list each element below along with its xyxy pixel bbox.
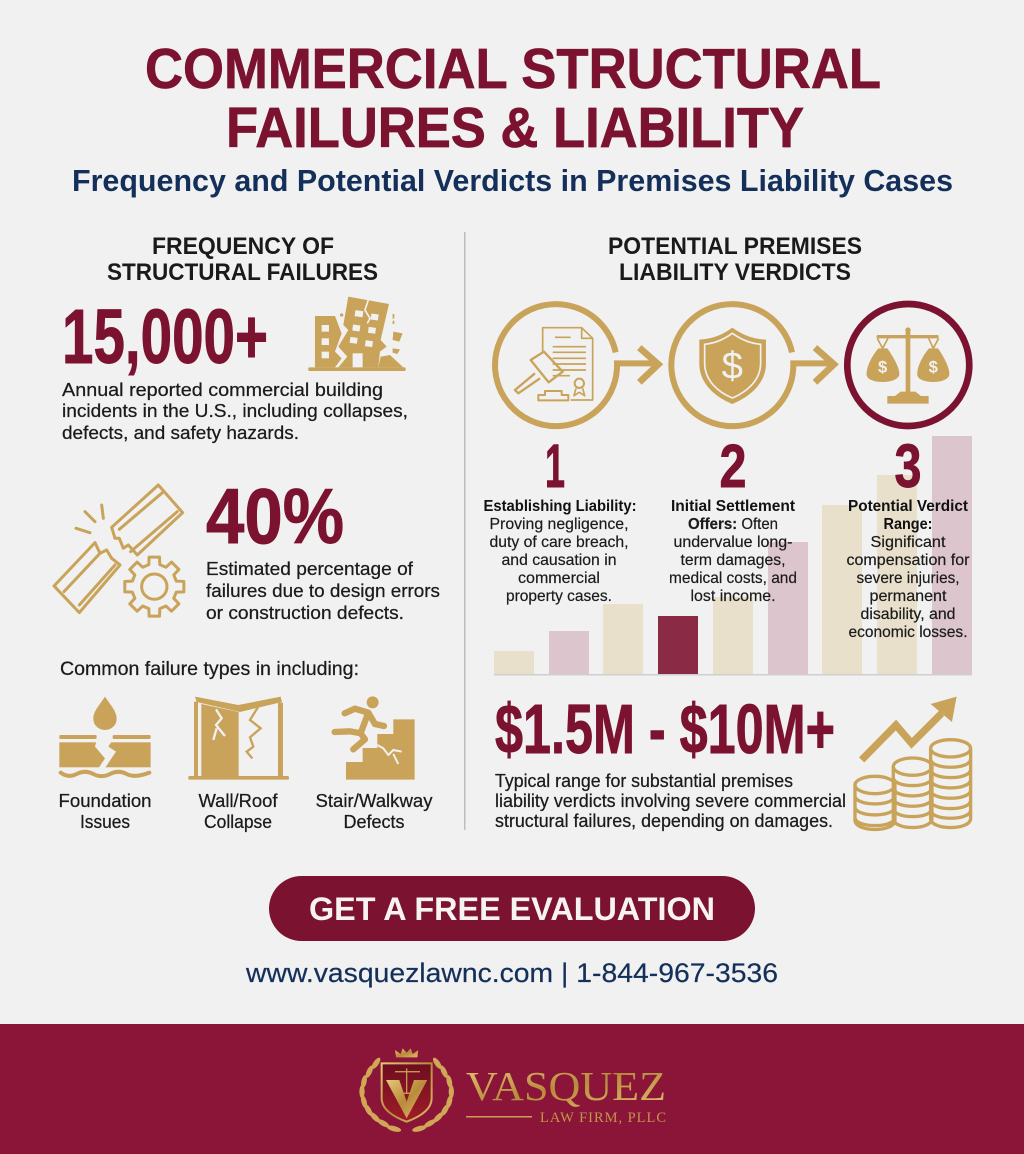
heading: frequency: STRUCTURAL FAILURES [107, 259, 378, 286]
step 2: medical costs, and [669, 570, 797, 587]
step 2 [669, 432, 797, 605]
icon: broken beam and gear [54, 485, 184, 616]
text: typical range: Typical range for substantial premises [495, 770, 793, 791]
text: annual incidents: incidents in the U.S., including collapses, [62, 400, 408, 421]
heading: frequency [107, 233, 378, 286]
step 3 [846, 432, 970, 641]
icon: shield with dollar in circle with arrow [671, 304, 834, 426]
call to action button: GET A FREE EVALUATION [309, 891, 715, 927]
stat: 40%: 40% [206, 472, 344, 560]
heading: verdicts: POTENTIAL PREMISES [608, 233, 862, 260]
label: foundation issues: Foundation [58, 790, 152, 811]
step 2: Offers: Often [688, 516, 778, 533]
label: foundation issues: Issues [80, 811, 130, 832]
step 1: commercial [518, 570, 600, 587]
panel: potential premises liability verdicts [484, 233, 972, 831]
text: typical range [495, 770, 846, 831]
text: design errors: Estimated percentage of [206, 558, 414, 579]
label: stair/walkway defects: Defects [344, 811, 404, 832]
step 3: Potential Verdict [848, 498, 969, 515]
panel: frequency of structural failures [54, 233, 440, 832]
stat: verdict range: $1.5M - $10M+ [495, 690, 835, 768]
text: typical range: structural failures, depending on damages. [495, 810, 833, 831]
label: foundation issues [58, 790, 152, 832]
heading: verdicts: LIABILITY VERDICTS [619, 259, 851, 286]
text: annual incidents: Annual reported commercial building [62, 379, 383, 400]
logo wordmark [466, 1063, 666, 1126]
icon: foundation issues [59, 697, 151, 776]
step 2: lost income. [690, 588, 776, 605]
logo emblem [359, 1048, 454, 1133]
step 1: and causation in [502, 552, 616, 569]
step 1 [484, 432, 636, 605]
call to action button [269, 876, 755, 941]
bar chart background [494, 436, 972, 676]
text: design errors [206, 558, 440, 623]
step 3: compensation for [846, 552, 970, 569]
label: stair/walkway defects: Stair/Walkway [316, 790, 433, 811]
text: common failure types: Common failure types in including: [60, 658, 359, 680]
step 2: term damages, [680, 552, 786, 569]
footer band [0, 1024, 1024, 1154]
contact line: www.vasquezlawnc.com | 1-844-967-3536 [245, 958, 778, 988]
icon: collapsing building [308, 297, 406, 371]
label: wall/roof collapse: Wall/Roof [198, 790, 278, 811]
icon: scales with money bags in maroon circle: $ [929, 357, 939, 376]
logo [359, 1048, 666, 1133]
subtitle: Frequency and Potential Verdicts in Premises Liability Cases [72, 164, 953, 198]
title [145, 37, 881, 160]
label: wall/roof collapse: Collapse [204, 811, 272, 832]
logo wordmark: LAW FIRM, PLLC [540, 1110, 666, 1126]
text: typical range: liability verdicts involving severe commercial [495, 790, 846, 811]
step 2: undervalue long- [674, 534, 792, 551]
step 2: 2 [720, 432, 746, 500]
label: stair/walkway defects [316, 790, 433, 832]
icon: scales with money bags in maroon circle: $ [878, 357, 888, 376]
icon: gavel and document in circle with arrow [495, 304, 658, 426]
step 3: disability, and [860, 606, 956, 623]
logo wordmark: VASQUEZ [466, 1063, 666, 1109]
step 2: Initial Settlement [671, 498, 796, 515]
heading: verdicts [608, 233, 862, 286]
step 3: severe injuries, [856, 570, 960, 587]
heading: frequency: FREQUENCY OF [152, 233, 334, 260]
label: wall/roof collapse [198, 790, 278, 832]
title: FAILURES & LIABILITY [226, 96, 804, 160]
step 3: Significant [870, 534, 946, 551]
icon: wall and roof collapse [188, 697, 289, 780]
step 3: 3 [894, 432, 922, 500]
icon: coin stacks with rising arrow [855, 697, 971, 829]
step 3: permanent [870, 588, 947, 605]
icon: stair defects with falling figure [335, 696, 415, 780]
stat: 15,000+: 15,000+ [62, 294, 268, 380]
title: COMMERCIAL STRUCTURAL [145, 37, 881, 101]
text: annual incidents: defects, and safety hazards. [62, 422, 299, 443]
step 1: property cases. [506, 588, 612, 605]
step 3: Range: [884, 516, 932, 533]
step 1: Establishing Liability: [484, 498, 636, 515]
text: design errors: or construction defects. [206, 602, 404, 623]
icon: scales with money bags in maroon circle [847, 304, 969, 426]
step 1: duty of care breach, [490, 534, 628, 551]
step 1: 1 [545, 432, 565, 500]
text: annual incidents [62, 379, 408, 443]
step 3: economic losses. [848, 624, 968, 641]
text: design errors: failures due to design errors [206, 580, 440, 601]
step 1: Proving negligence, [490, 516, 628, 533]
icon: shield with dollar in circle with arrow: $ [722, 344, 743, 387]
